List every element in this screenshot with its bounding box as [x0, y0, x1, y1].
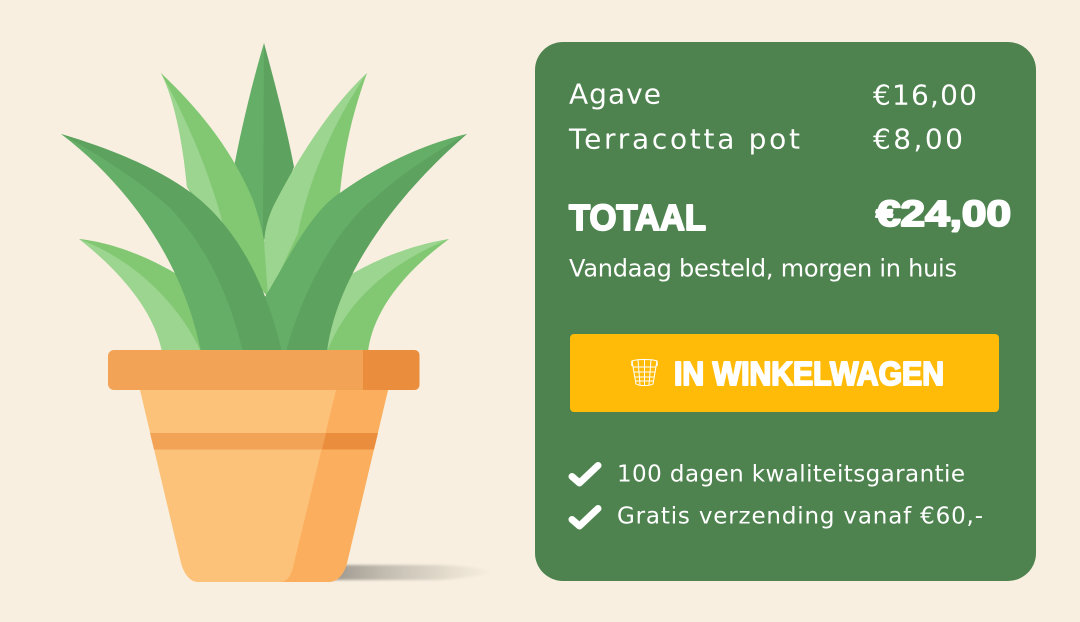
pot body: [140, 390, 388, 582]
icon: check 1: [572, 466, 598, 483]
icon: basket: [632, 360, 657, 386]
pot shadow: [325, 565, 494, 580]
total price: €24,00: [876, 193, 1011, 234]
button: add to cart: [570, 334, 999, 412]
item: Terracotta pot: Terracotta pot: [568, 122, 800, 156]
icon: check 2: [572, 508, 598, 526]
panel: order summary: [535, 42, 1036, 581]
button label: IN WINKELWAGEN: [674, 355, 944, 392]
lower left leaf: [79, 239, 205, 352]
item: Agave: Agave: [569, 78, 661, 110]
lower right leaf: [322, 239, 449, 352]
pot rim: [108, 350, 420, 390]
large left leaf: [61, 134, 282, 352]
back centre leaf: [234, 43, 294, 240]
upper left leaf: [161, 73, 268, 297]
price: Terracotta pot: €8,00: [873, 122, 963, 156]
large right leaf: [265, 134, 467, 352]
delivery note: Vandaag besteld, morgen in huis: [569, 254, 957, 282]
total label: TOTAAL: [569, 197, 706, 238]
upper right leaf: [264, 73, 367, 297]
price: Agave: €16,00: [873, 78, 977, 112]
shipping text: Gratis verzending vanaf €60,-: [617, 504, 983, 530]
guarantee text: 100 dagen kwaliteitsgarantie: [617, 462, 965, 488]
illustration: potted agave: [61, 43, 494, 582]
